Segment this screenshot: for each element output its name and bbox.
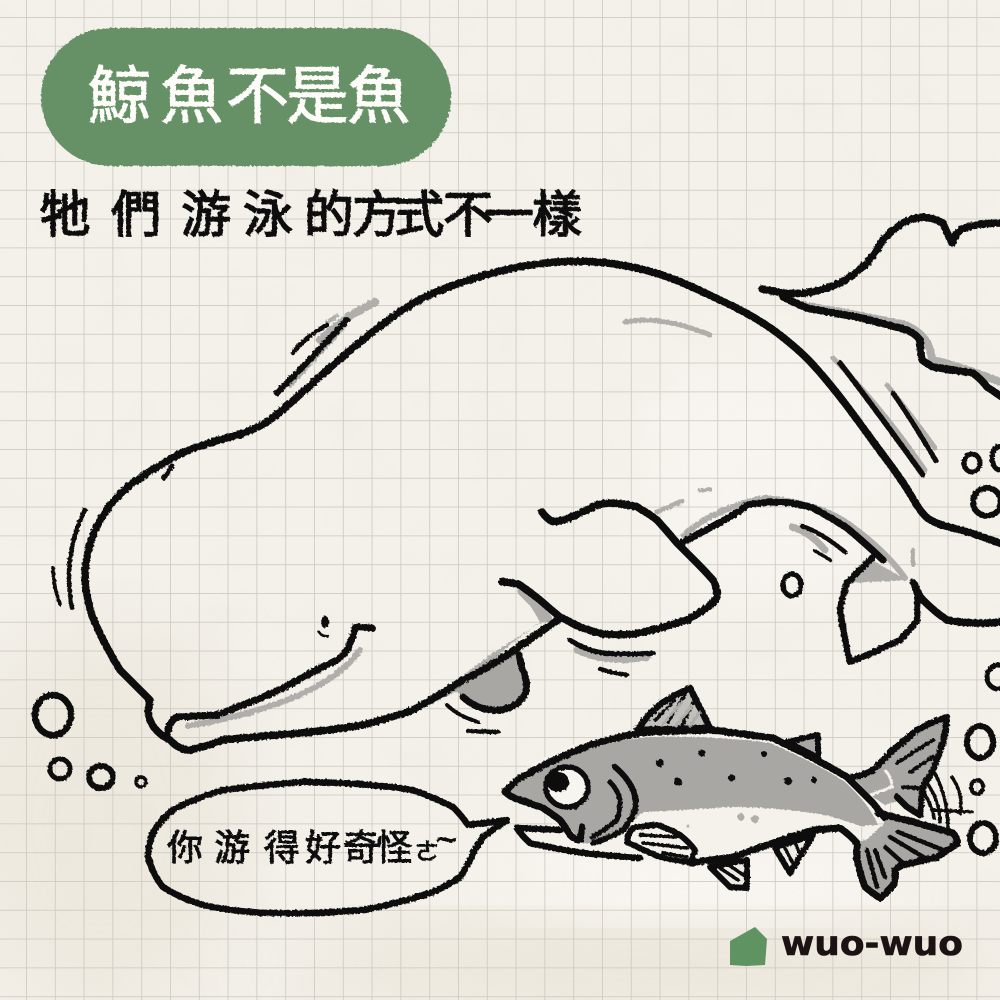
fish: dorsal fin [637, 688, 710, 730]
fish: head lower line [505, 792, 582, 840]
speech bubble text: ~ [436, 819, 457, 860]
fish: ripple lines by tail [922, 768, 972, 828]
whale: rear body outline [683, 502, 883, 560]
whale: tail fluke [762, 217, 1000, 294]
whale: blowhole [164, 466, 172, 478]
fish: upper tail rays [897, 740, 933, 788]
fish: belly spots [686, 814, 759, 828]
fish: gill lines [593, 767, 636, 843]
whale: mouth line [167, 627, 372, 735]
whale: motion lines [53, 320, 498, 732]
whale illustration [35, 217, 1000, 853]
bubbles [35, 446, 1000, 853]
fish: tail rays [867, 832, 943, 887]
fish: adipose fin [788, 735, 818, 758]
whale: skin lines [840, 363, 923, 475]
title text: 鯨魚不是魚 [88, 62, 410, 132]
fish: pectoral fin [627, 825, 695, 862]
subtitle: 牠們游泳的方式不一樣 [40, 187, 582, 243]
whale: belly line [172, 620, 558, 750]
fish: lower jaw [517, 828, 640, 858]
whale: grey shading [188, 302, 1000, 726]
whale: eye [319, 616, 329, 636]
fish: body pale base [503, 730, 883, 863]
fish: eye [546, 767, 588, 808]
fish: dorsal rays [655, 695, 695, 725]
whale: rear belly line [915, 585, 1000, 623]
fish: lower fins [710, 835, 813, 888]
fish: body grey [510, 737, 878, 843]
logo: wuo-wuo wordmark: wuo-wuo [781, 924, 963, 964]
fish: upper tail [853, 717, 947, 815]
fish: lower tail [857, 815, 958, 898]
whale: large flipper [502, 503, 717, 634]
whale: back outline [85, 261, 1000, 740]
speech bubble text: ㄜ [415, 839, 439, 866]
whale: lower fin [455, 652, 527, 710]
fish: spots [656, 750, 817, 786]
fish: back outline [505, 730, 885, 818]
salmon fish [503, 688, 972, 898]
speech bubble [148, 782, 507, 913]
speech bubble text: 你游得好奇怪 [167, 827, 412, 868]
logo: house icon [730, 927, 767, 966]
whale: flipper ripples [570, 640, 653, 675]
title pill [41, 28, 451, 166]
whale: rear flipper [840, 557, 918, 662]
